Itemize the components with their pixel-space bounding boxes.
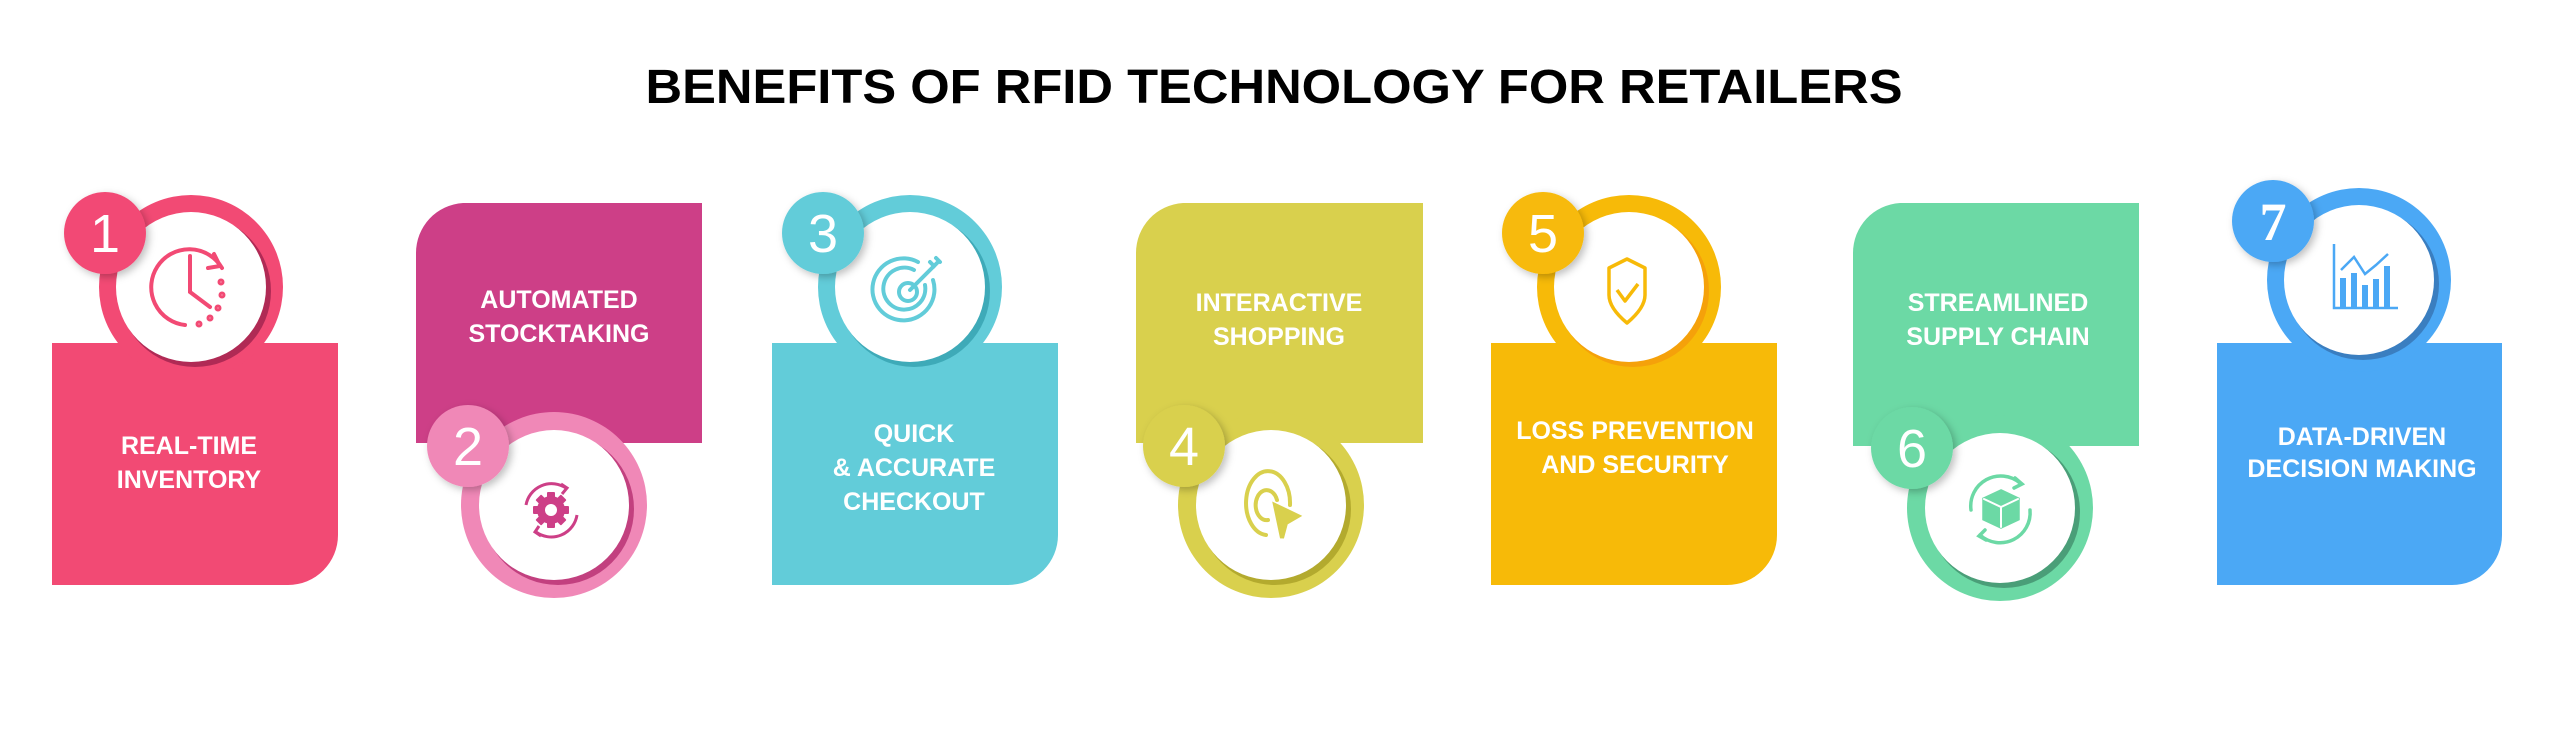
icon: gear — [526, 484, 577, 537]
badge: 6 — [1871, 407, 1953, 489]
text: real-time inventory: REAL-TIME — [121, 432, 257, 460]
text: loss prevention and security: LOSS PREVENTION — [1516, 417, 1754, 445]
icon: box with arrows — [1971, 476, 2030, 543]
icon: clock — [151, 249, 224, 326]
text: interactive shopping: INTERACTIVE — [1196, 289, 1362, 317]
badge: 3 — [782, 192, 864, 274]
panel: 2 automated stocktaking — [416, 203, 702, 598]
icon: cursor — [1246, 471, 1298, 538]
badge: 5 — [1502, 192, 1584, 274]
panel: 1 real-time inventory — [52, 192, 338, 585]
text: streamlined supply chain: STREAMLINED — [1908, 289, 2088, 317]
panel: 4 interactive shopping: SHOPPING — [1213, 323, 1345, 351]
icon: chart — [2334, 244, 2398, 308]
panel: 3 quick & accurate checkout — [772, 192, 1058, 585]
badge: 4 — [1143, 405, 1225, 487]
panel: 1 real-time inventory: INVENTORY — [117, 466, 262, 494]
icon: shield — [1609, 259, 1645, 323]
panel: 3 quick & accurate checkout: 3 — [808, 204, 838, 264]
panel: 5 loss prevention and security: 5 — [1528, 204, 1558, 264]
panel: 7 data-driven decision making: 7 — [2260, 192, 2286, 252]
badge: 7 — [2232, 180, 2314, 262]
panel: 4 interactive shopping — [1136, 203, 1423, 598]
panel: 5 loss prevention and security: AND SECURITY — [1541, 451, 1729, 479]
icon: target — [872, 258, 940, 320]
panel: 6 streamlined supply chain: 6 — [1897, 419, 1927, 479]
panel: 1 real-time inventory: 1 — [90, 204, 120, 264]
panel: 6 streamlined supply chain — [1853, 203, 2139, 601]
panel: 5 loss prevention and security — [1491, 192, 1777, 585]
badge: 1 — [64, 192, 146, 274]
panel: 3 quick & accurate checkout: & ACCURATE — [833, 454, 995, 482]
title: BENEFITS OF RFID TECHNOLOGY FOR RETAILERS — [646, 61, 1902, 114]
panel: 6 streamlined supply chain: SUPPLY CHAIN — [1906, 323, 2090, 351]
panel: 2 automated stocktaking: STOCKTAKING — [468, 320, 650, 348]
panel: 7 data-driven decision making: DECISION MAKING — [2247, 455, 2477, 483]
badge: 2 — [427, 405, 509, 487]
text: automated stocktaking: AUTOMATED — [480, 286, 638, 314]
panel: 3 quick & accurate checkout: CHECKOUT — [843, 488, 985, 516]
text: data-driven decision making: DATA-DRIVEN — [2278, 423, 2446, 451]
panel: 7 data-driven decision making — [2217, 180, 2502, 585]
text: quick & accurate checkout: QUICK — [874, 420, 954, 448]
panel: 4 interactive shopping: 4 — [1169, 417, 1199, 477]
panel: 2 automated stocktaking: 2 — [453, 417, 483, 477]
